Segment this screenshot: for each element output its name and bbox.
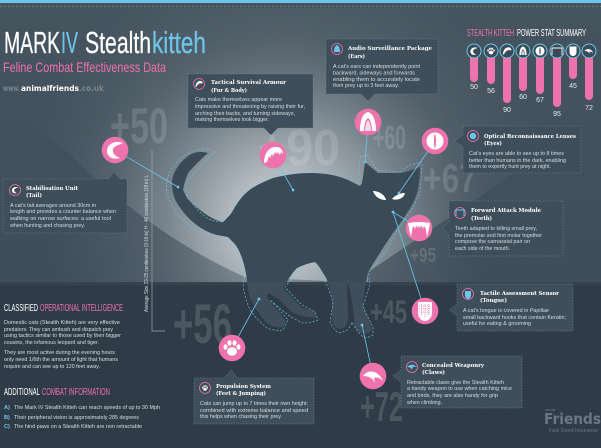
classified text: using tactics similar to those used by their bigger <box>4 333 121 339</box>
additional heading: COMBAT INFORMATION <box>42 386 110 398</box>
panel: stabilisation unit: walking on narrow surfaces: a useful tool <box>9 216 111 222</box>
website: animalfriends <box>21 84 80 93</box>
panel: stabilisation unit: (Tail) <box>26 192 42 199</box>
panel: optical reconnaissance lenses: Cat's eyes are able to see up to 8 times <box>469 151 564 157</box>
icon: eye <box>422 128 448 154</box>
bar chart: power stats: 60 <box>519 94 527 101</box>
big stat numbers: +45 <box>370 294 407 330</box>
panel: tactile assessment sensor <box>449 284 573 331</box>
additional heading: ADDITIONAL <box>4 386 40 398</box>
classified text <box>4 320 121 370</box>
panel: audio surveillance package <box>326 39 438 101</box>
bar chart: power stats: 95 <box>553 111 561 118</box>
size axis <box>144 150 165 331</box>
panel: tactile assessment sensor: useful for eating & grooming <box>463 321 531 327</box>
title: IV <box>61 25 78 60</box>
big stat numbers: +72 <box>360 383 403 430</box>
size axis: Average Size 23-25 centimetres (9-10 in) H - 46 centimetres (18 in) L <box>144 175 150 312</box>
panel: audio surveillance package: (Ears) <box>348 53 365 60</box>
panel: forward attack module: Forward Attack Module <box>471 208 541 214</box>
panel: tactical survival armour: impressive and threatening by raising their fur, <box>195 104 305 110</box>
panel: tactical survival armour <box>188 74 313 135</box>
panel: audio surveillance package: Audio Surveillance Package <box>347 46 432 52</box>
panel: optical reconnaissance lenses <box>455 126 581 173</box>
bar chart: power stats: 56 <box>487 88 495 95</box>
logo: animal friends: Feel Good Insurance <box>549 428 598 434</box>
panel: tactile assessment sensor: (Tongue) <box>480 297 507 304</box>
panel: tactile assessment sensor: small backward hooks that contain Keratin; <box>463 315 566 321</box>
panel: propulsion system: combined with extreme balance and speed <box>200 408 308 414</box>
website: www. <box>3 84 20 93</box>
classified text: require and can see up to 120 feet away. <box>4 364 100 370</box>
panel: propulsion system: Cats can jump up to 7 times their own height; <box>200 401 308 407</box>
title: Stealth <box>85 25 151 60</box>
bar chart: power stats: 50 <box>470 84 478 91</box>
panel: forward attack module: (Teeth) <box>471 215 492 222</box>
bar chart: power stats: 72 <box>585 105 593 112</box>
bar chart: power stats <box>467 44 596 118</box>
additional list: A) <box>4 405 10 411</box>
classified text: cousins, the infamous leopard and tiger. <box>4 340 99 346</box>
connector lines <box>115 122 435 376</box>
panel: stabilisation unit: Stabilisation Unit <box>26 186 78 192</box>
panel: optical reconnaissance lenses: Optical Reconnaissance Lenses <box>484 134 577 140</box>
panel: propulsion system: (Feet & Jumping) <box>216 390 266 397</box>
panel: concealed weaponry: a handy weapon to use when catching mice <box>407 386 512 392</box>
panel: stabilisation unit: A cat's tail averages around 30cm in <box>10 203 96 209</box>
panel: audio surveillance package: backward, sideways and forwards <box>333 70 415 76</box>
panel: concealed weaponry: Retractable claws give the Stealth Kitteh <box>407 380 504 386</box>
icon: tail <box>102 137 128 163</box>
additional heading <box>4 386 110 398</box>
icon: paw <box>219 335 245 361</box>
power stat summary heading: STEALTH KITTEH <box>467 28 514 39</box>
logo: animal friends <box>544 408 601 434</box>
additional list: Their peripheral vision is approximately 285 degrees <box>14 415 139 421</box>
title: MARK <box>4 25 60 60</box>
website <box>3 84 105 93</box>
additional list: The hind paws on a Stealth Kitteh are non retractable <box>14 424 142 430</box>
panel: propulsion system: this helps when chasing their prey. <box>200 414 282 420</box>
panel: audio surveillance package: A cat's ears can independently point <box>333 64 420 70</box>
subtitle: Feline Combat Effectiveness Data <box>3 59 166 75</box>
panel: propulsion system: Propulsion System <box>216 384 271 390</box>
classified text: predators. They can ambush and dispatch prey <box>4 327 113 333</box>
cat silhouette <box>172 152 420 333</box>
classified heading <box>4 302 123 314</box>
logo: animal friends: animal <box>545 408 556 412</box>
panel: tactical survival armour: Tactical Survival Armour <box>211 80 287 86</box>
panel: stabilisation unit: length and provides a counter balance when <box>10 209 116 215</box>
classified text: Domestic cats (Stealth Kitteh) are very effective <box>4 320 120 326</box>
big stat numbers: +95 <box>410 245 436 267</box>
icon: teeth <box>406 215 432 241</box>
panel: optical reconnaissance lenses: them to expertly hunt prey at night. <box>469 164 551 170</box>
panel: forward attack module: each side of the mouth. <box>455 246 510 252</box>
panel: optical reconnaissance lenses: (Eyes) <box>484 140 502 147</box>
panel: concealed weaponry: and birds, they are also handy for grip <box>407 393 498 399</box>
panel: concealed weaponry: Concealed Weaponry <box>422 363 485 369</box>
power stat summary heading <box>467 28 586 39</box>
panel: concealed weaponry: when climbing. <box>406 400 442 406</box>
bar chart: power stats: 67 <box>536 97 544 104</box>
additional list: C) <box>4 424 10 430</box>
big stat numbers: +67 <box>423 157 477 201</box>
panel: audio surveillance package: enabling them to accurately locate <box>333 77 420 83</box>
title <box>4 25 206 60</box>
panel: tactile assessment sensor: Tactile Assessment Sensor <box>480 291 560 297</box>
panel: tactile assessment sensor: A cat's tongue is covered in Papillae <box>463 308 549 314</box>
big stat numbers: +50 <box>110 98 168 154</box>
additional list: The Mark IV Stealth Kitteh can reach speeds of up to 30 Mph <box>14 405 160 411</box>
bar chart: power stats: 90 <box>503 107 511 114</box>
panel: audio surveillance package: their prey up to 3 feet away. <box>333 83 399 89</box>
connector dots <box>177 161 400 326</box>
panel: forward attack module: Teeth adapted to killing small prey, <box>455 226 537 232</box>
panel: stabilisation unit <box>3 172 127 233</box>
panel: optical reconnaissance lenses: better than humans in the dark, enabling <box>469 158 566 164</box>
classified text: only need 1/6th the amount of light that humans <box>4 357 118 363</box>
additional list <box>4 405 160 430</box>
classified heading: CLASSIFIED <box>4 302 38 314</box>
icon: ears <box>355 109 381 135</box>
icon: claw <box>360 363 386 389</box>
panel: tactical survival armour: (Fur & Body) <box>211 87 247 94</box>
additional list: B) <box>4 415 10 421</box>
panel: concealed weaponry <box>393 356 522 408</box>
big stat numbers: +60 <box>373 119 406 157</box>
dashed outline <box>166 149 422 337</box>
bar chart: power stats: 45 <box>569 83 577 90</box>
panel: stabilisation unit: when hunting and chasing prey. <box>9 223 85 229</box>
website: .co.uk <box>79 84 105 93</box>
panel: tactical survival armour: making themselves look bigger. <box>195 117 269 123</box>
panel: tactical survival armour: Cats make themselves appear more <box>195 97 282 103</box>
panel: concealed weaponry: (Claws) <box>422 369 445 376</box>
panel: forward attack module: the premolar and first molar together <box>455 233 542 239</box>
icon: tongue <box>412 298 438 324</box>
icon: fur <box>260 142 286 168</box>
panel: propulsion system <box>194 370 314 424</box>
big stat numbers <box>110 98 477 430</box>
panel: tactical survival armour: arching their backs, and turning sideways, <box>195 111 295 117</box>
panel: forward attack module <box>442 201 563 256</box>
panel: forward attack module: compose the carnassial pair on <box>455 239 530 245</box>
title: kitteh <box>152 25 206 60</box>
classified heading: OPERATIONAL INTELLIGENCE <box>40 302 123 314</box>
big stat numbers: +56 <box>173 292 232 355</box>
big stat numbers: +90 <box>258 119 340 176</box>
cat eyes <box>373 191 405 200</box>
classified text: They are most active during the evening hours <box>4 350 115 356</box>
